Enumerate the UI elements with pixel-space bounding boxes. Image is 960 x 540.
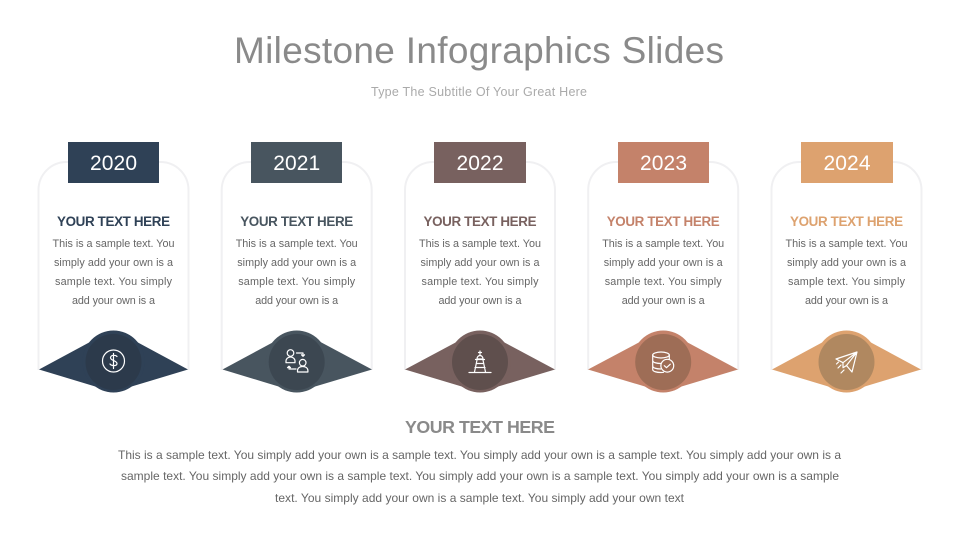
heading: YOUR TEXT HERE	[607, 214, 720, 229]
year tab: 2020	[90, 152, 137, 175]
text block: add your own is a	[438, 295, 522, 307]
text block: simply add your own is a	[54, 257, 173, 269]
text block: simply add your own is a	[604, 257, 723, 269]
panel: milestone 2021	[222, 142, 372, 392]
card outline	[405, 162, 555, 370]
heading: YOUR TEXT HERE	[790, 214, 903, 229]
text block: This is a sample text. You	[236, 238, 358, 250]
year tab: 2021	[273, 152, 320, 175]
icon: database check	[653, 352, 674, 372]
subtitle: Type The Subtitle Of Your Great Here	[371, 85, 587, 99]
panel: milestone 2022	[405, 142, 555, 392]
text block: add your own is a	[72, 295, 155, 307]
text block: sample text. You simply	[55, 276, 173, 288]
text block: This is a sample text. You	[602, 238, 724, 250]
panel: milestone 2024	[772, 142, 922, 392]
icon: chess piece tower	[469, 351, 491, 372]
text block: simply add your own is a	[237, 257, 356, 269]
year tab	[68, 142, 159, 183]
year tab: 2022	[456, 152, 504, 175]
year tab	[434, 142, 526, 183]
text block	[786, 238, 908, 307]
card outline	[772, 162, 922, 370]
year tab: 2024	[824, 152, 871, 175]
text block	[52, 238, 174, 307]
card outline	[588, 162, 738, 370]
text block: This is a sample text. You	[786, 238, 908, 250]
title: Milestone Infographics Slides	[234, 30, 724, 71]
heading: YOUR TEXT HERE	[240, 214, 353, 229]
panel: milestone 2020	[38, 142, 188, 392]
text block: add your own is a	[622, 295, 705, 307]
bottom text block	[118, 448, 841, 505]
text block	[236, 238, 358, 307]
bottom text block: This is a sample text. You simply add your own is a sample text. You simply add your own is a sample text. You simply add your own is a	[118, 448, 841, 462]
text block: sample text. You simply	[422, 276, 539, 288]
icon: people exchange	[286, 350, 308, 372]
text block: add your own is a	[255, 295, 338, 307]
text block: This is a sample text. You	[52, 238, 174, 250]
bottom text block: sample text. You simply add your own is a sample text. You simply add your own is a sample text. You simply add your own is a sample	[121, 469, 839, 483]
text block: sample text. You simply	[238, 276, 356, 288]
diamond base	[588, 330, 738, 392]
text block: add your own is a	[805, 295, 888, 307]
year tab	[801, 142, 893, 183]
diamond base	[405, 330, 555, 392]
year tab	[251, 142, 342, 183]
year tab	[618, 142, 709, 183]
card outline	[38, 162, 188, 370]
text block: This is a sample text. You	[419, 238, 541, 250]
diamond base	[222, 330, 372, 392]
diamond base	[772, 330, 921, 392]
text block	[602, 238, 724, 307]
text block: simply add your own is a	[787, 257, 906, 269]
year tab: 2023	[640, 152, 687, 175]
text block: simply add your own is a	[420, 257, 540, 269]
heading: YOUR TEXT HERE	[424, 214, 537, 229]
bottom heading: YOUR TEXT HERE	[405, 417, 555, 437]
text block: sample text. You simply	[605, 276, 722, 288]
heading: YOUR TEXT HERE	[57, 214, 170, 229]
icon: paper plane	[836, 352, 857, 373]
text block: sample text. You simply	[788, 276, 906, 288]
bottom text block: text. You simply add your own is a sample text. You simply add your own text	[275, 491, 685, 505]
text block	[419, 238, 541, 307]
panel: milestone 2023	[588, 142, 738, 392]
card outline	[222, 162, 372, 370]
diamond base	[39, 330, 188, 392]
icon: dollar coin	[102, 350, 124, 372]
